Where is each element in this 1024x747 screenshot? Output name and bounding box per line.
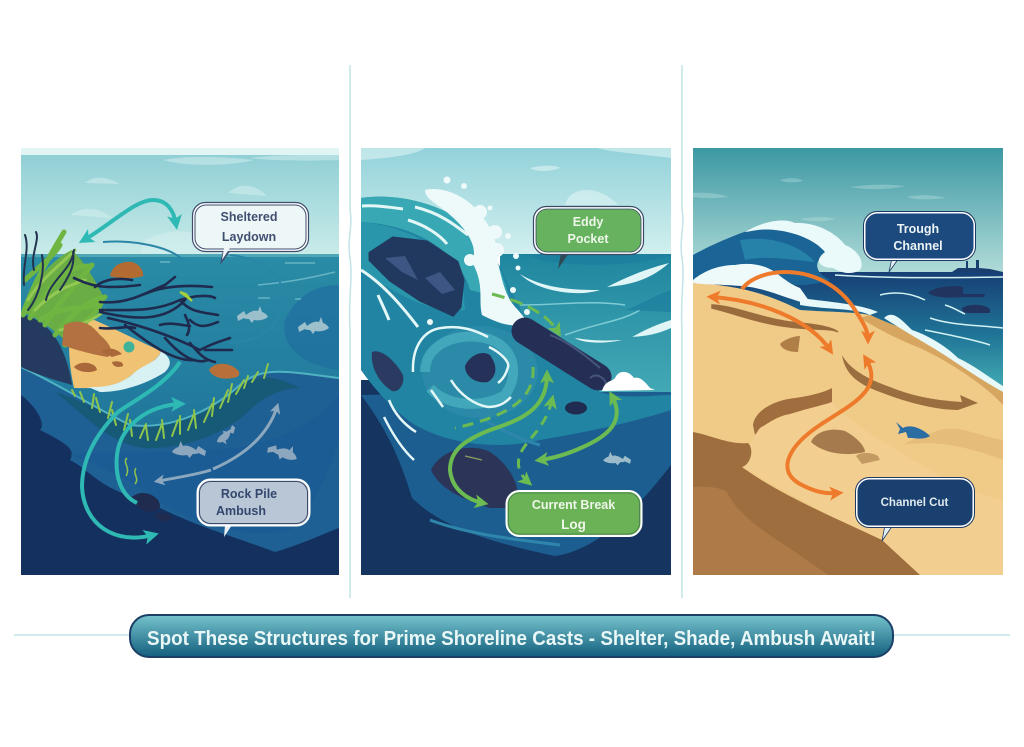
sand bbox=[693, 283, 1003, 575]
cliff ledge bbox=[753, 388, 832, 435]
double arrow top bbox=[84, 200, 176, 240]
sky bbox=[361, 148, 671, 254]
log bbox=[525, 331, 606, 385]
green double arrow bbox=[540, 396, 617, 460]
divider right bbox=[681, 65, 683, 598]
boulder top left bbox=[370, 238, 463, 315]
lower brown cut bbox=[693, 432, 920, 575]
fish bbox=[603, 452, 631, 465]
callout: eddy pocket: Pocket bbox=[568, 232, 609, 246]
callout: sheltered laydown bbox=[192, 202, 308, 265]
deep water base bbox=[361, 380, 671, 575]
callout: rock pile ambush bbox=[198, 480, 310, 537]
bottom banner: Spot These Structures for Prime Shoreline Casts - Shelter, Shade, Ambush Await! bbox=[147, 628, 876, 650]
sea bbox=[693, 272, 1003, 397]
top haze bbox=[21, 148, 339, 155]
callout: eddy pocket: Eddy bbox=[573, 215, 603, 229]
panel: trough channel and channel cut bbox=[693, 148, 1003, 575]
clouds bbox=[70, 155, 339, 254]
brown shore rock bbox=[62, 322, 111, 357]
wave base foam bbox=[693, 264, 812, 305]
faint clouds bbox=[693, 178, 946, 221]
leaf on branch bbox=[180, 292, 192, 301]
sea swell lines bbox=[520, 303, 640, 335]
callout: rock pile ambush: Rock Pile bbox=[221, 487, 277, 501]
footprint pit bbox=[780, 336, 800, 352]
rock right of tree bbox=[209, 364, 239, 379]
orange S arrow bbox=[787, 359, 871, 493]
fallen branches bbox=[74, 277, 232, 362]
callout: current break log: Log bbox=[561, 517, 586, 532]
callout: trough channel: Trough bbox=[897, 222, 939, 236]
lower left bank bbox=[693, 487, 828, 575]
callout: sheltered laydown: Sheltered bbox=[221, 210, 277, 224]
callout: current break log bbox=[506, 491, 642, 536]
terrace sand bbox=[742, 402, 1003, 575]
teal arrow two bbox=[117, 404, 180, 503]
small shore rocks bbox=[74, 348, 123, 372]
sand shore bbox=[69, 312, 161, 388]
divider left bbox=[349, 65, 351, 598]
sea white streaks bbox=[835, 275, 1003, 345]
centre rock bbox=[465, 353, 495, 382]
orange double arrow bbox=[712, 297, 830, 350]
damp patch bbox=[903, 429, 1003, 460]
algae bbox=[125, 458, 137, 484]
big boulder bbox=[431, 448, 518, 508]
callout: trough channel bbox=[864, 212, 976, 272]
wave upper-left bbox=[361, 222, 465, 311]
seabed lens bbox=[55, 378, 300, 448]
callout: sheltered laydown: Laydown bbox=[222, 230, 276, 244]
mid water patch bbox=[70, 454, 72, 456]
callout: channel cut: Channel Cut bbox=[881, 497, 949, 509]
deep water bbox=[21, 395, 339, 575]
green arrow bbox=[450, 375, 547, 503]
callout: trough channel: Channel bbox=[893, 239, 943, 253]
sand rock bbox=[811, 430, 880, 464]
sea streaks bbox=[520, 263, 671, 343]
wave crest foam bbox=[745, 220, 862, 273]
pile rocks bbox=[132, 493, 172, 521]
left rock bbox=[372, 351, 403, 391]
spray bbox=[425, 176, 530, 325]
fish bbox=[896, 422, 930, 439]
wave streaks white bbox=[361, 206, 468, 327]
wet sand band bbox=[860, 315, 1003, 405]
trench upper bbox=[712, 305, 838, 332]
surface line bbox=[21, 367, 339, 426]
bottom banner bbox=[130, 615, 893, 657]
callout: rock pile ambush: Ambush bbox=[216, 504, 266, 518]
teal arrow one bbox=[82, 362, 180, 538]
seagrass row bbox=[72, 364, 268, 440]
gray arrow bbox=[158, 407, 277, 481]
haze and clouds bbox=[361, 148, 671, 205]
fish bbox=[267, 445, 297, 460]
sky bbox=[693, 148, 1003, 274]
orange arc arrow bbox=[742, 272, 868, 339]
horizon ship silhouette bbox=[952, 260, 1003, 275]
brown rock in water bbox=[110, 262, 143, 278]
banner connector right bbox=[893, 634, 1010, 636]
shore grass bbox=[21, 232, 105, 350]
wave crest bbox=[361, 197, 510, 300]
dark sea band bbox=[520, 254, 671, 312]
shore foam bbox=[800, 298, 1003, 392]
green float bbox=[124, 342, 134, 352]
dark reeds bbox=[24, 232, 74, 310]
panel: sheltered laydown and rock pile bbox=[21, 148, 339, 575]
fish bbox=[172, 441, 206, 458]
underwater mid layer bbox=[21, 368, 339, 552]
sky bbox=[21, 148, 339, 254]
sea bbox=[21, 257, 339, 425]
callout: channel cut bbox=[856, 478, 974, 541]
thin arc bbox=[102, 240, 282, 284]
callout: eddy pocket bbox=[534, 206, 644, 269]
foam bbox=[88, 351, 170, 392]
small rock bbox=[565, 402, 587, 414]
sea rocks bbox=[928, 286, 990, 313]
mid water lens bbox=[361, 392, 671, 556]
panel: eddy pocket and current break log bbox=[361, 148, 671, 575]
light streaks bbox=[160, 262, 335, 299]
foam by log bbox=[602, 372, 655, 391]
banner connector left bbox=[14, 634, 130, 636]
dark bank rock bbox=[21, 315, 72, 385]
callout: current break log: Current Break bbox=[532, 498, 615, 512]
fish bbox=[237, 306, 268, 323]
infographic canvas bbox=[14, 65, 1010, 658]
sea depth patch bbox=[284, 285, 339, 370]
fish bbox=[298, 317, 329, 334]
green dashed arrow mid bbox=[455, 367, 533, 428]
trench lower bbox=[842, 355, 978, 410]
green dashed arrow upper bbox=[492, 294, 558, 332]
sea bbox=[500, 254, 671, 404]
teal wave body bbox=[361, 197, 671, 445]
big wave bbox=[693, 222, 835, 285]
whirlpool rings bbox=[384, 326, 560, 545]
fish bbox=[216, 425, 235, 444]
green dashed arrow low bbox=[518, 400, 552, 482]
